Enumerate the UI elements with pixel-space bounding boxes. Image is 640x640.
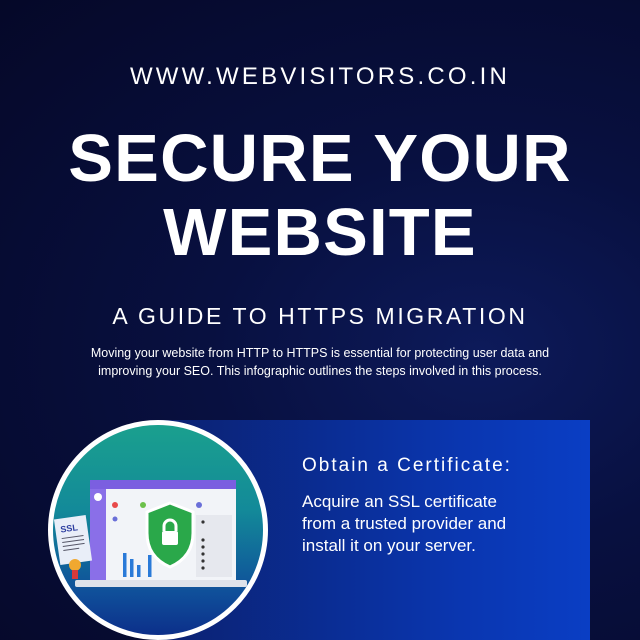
illustration circle: [48, 420, 268, 640]
site url: WWW.WEBVISITORS.CO.IN: [130, 63, 510, 90]
intro text: Moving your website from HTTP to HTTPS is essential for protecting user data and improving your SEO. This infographic outlines the steps involved in this process.: [91, 346, 549, 378]
title: [68, 121, 572, 270]
panel: obtain a certificate: [160, 420, 590, 640]
title: WEBSITE: [163, 195, 477, 270]
icon: laptop with shield: [54, 480, 247, 587]
step text: Acquire an SSL certificate from a trusted provider and install it on your server.: [302, 492, 506, 555]
title: SECURE YOUR: [68, 121, 572, 196]
subtitle: A GUIDE TO HTTPS MIGRATION: [112, 303, 528, 329]
step heading: Obtain a Certificate:: [302, 455, 512, 476]
icon: laptop with shield: SSL: [60, 522, 79, 535]
